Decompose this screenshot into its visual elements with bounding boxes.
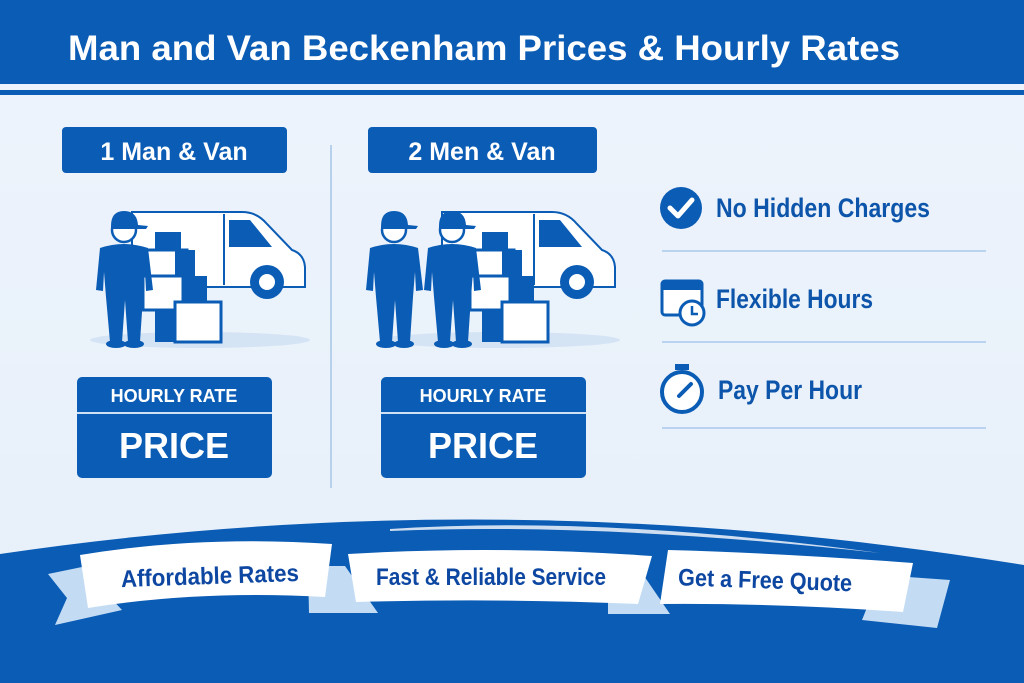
feature: pay per hour: Pay Per Hour <box>718 375 862 405</box>
ribbon tails <box>48 566 950 628</box>
price box 2: HOURLY RATE <box>420 386 546 406</box>
header band <box>0 0 1024 95</box>
title: Man and Van Beckenham Prices & Hourly Rates <box>68 29 900 68</box>
label: 2 Men & Van <box>368 127 597 173</box>
ribbon: get a free quote <box>660 550 913 612</box>
feature: flexible hours: Flexible Hours <box>716 284 873 314</box>
label: 1 Man & Van <box>62 127 287 173</box>
price box 2 <box>381 377 586 478</box>
price box 1: PRICE <box>119 425 229 466</box>
price box 2: PRICE <box>428 425 538 466</box>
panel: 1 man & van <box>62 127 310 478</box>
price box 1 <box>77 377 272 478</box>
ribbon: get a free quote: Get a Free Quote <box>678 564 853 597</box>
illustration: man with van and boxes <box>90 211 310 348</box>
divider <box>330 145 332 488</box>
feature: no hidden charges: No Hidden Charges <box>716 193 930 223</box>
label: 2 Men & Van: 2 Men & Van <box>408 138 556 166</box>
price box 1: HOURLY RATE <box>111 386 237 406</box>
panel: features <box>660 187 986 428</box>
ribbon: fast & reliable service: Fast & Reliable Service <box>376 564 606 591</box>
ribbon: affordable rates <box>80 541 332 608</box>
ribbon: fast & reliable service <box>348 550 652 604</box>
bottom banner <box>0 520 1024 683</box>
panel: 2 men & van <box>366 127 620 478</box>
label: 1 Man & Van: 1 Man & Van <box>100 138 248 166</box>
ribbon: affordable rates: Affordable Rates <box>120 560 299 593</box>
feature: pay per hour <box>662 364 862 412</box>
feature: flexible hours <box>662 281 873 325</box>
feature: no hidden charges <box>660 187 930 229</box>
illustration: two men with van and boxes <box>366 211 620 348</box>
